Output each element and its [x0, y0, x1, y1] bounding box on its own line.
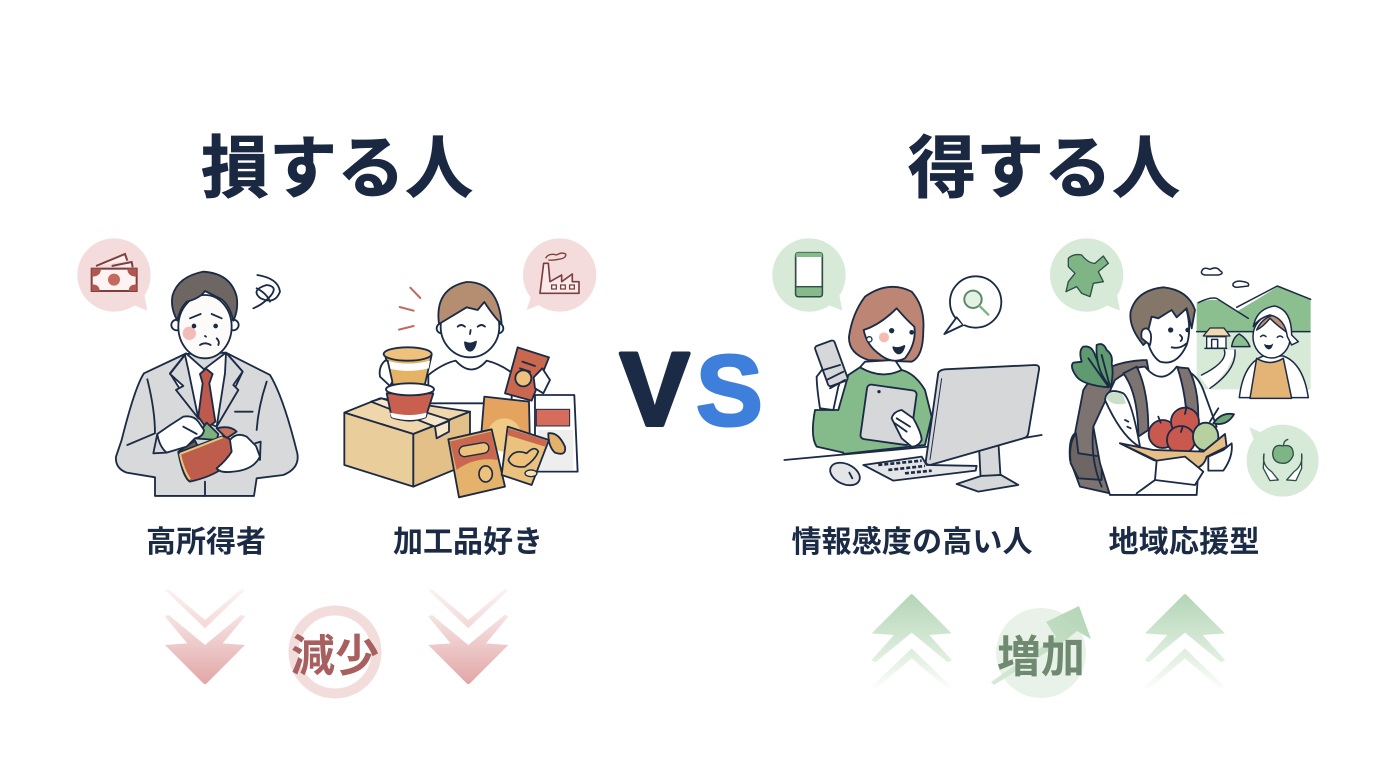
letter V: V — [620, 332, 689, 448]
cookie bag front — [502, 427, 549, 485]
heading: 得する人: 得する人 — [908, 131, 1180, 207]
badge: 増加 — [991, 606, 1091, 698]
suit jacket — [116, 353, 298, 496]
backpack straps — [1123, 367, 1198, 437]
tablet in hand — [860, 384, 922, 447]
keyboard — [863, 457, 977, 481]
up arrows: increase — [872, 594, 1225, 688]
label: 地域応援型: 地域応援型 — [1108, 526, 1260, 559]
computer mouse — [827, 458, 863, 490]
necktie — [198, 369, 215, 428]
sweater — [813, 367, 932, 454]
icon: worry swirl — [253, 275, 280, 308]
desk line — [784, 435, 1042, 460]
double chevron right — [428, 589, 508, 684]
icon: money speech bubble — [77, 238, 151, 312]
snack bag — [480, 397, 530, 452]
hands — [153, 416, 261, 472]
instant noodle cups — [380, 347, 434, 421]
snack pack held up — [505, 347, 550, 401]
double chevron left — [872, 594, 952, 688]
badge: 減少: 減少 — [291, 632, 379, 681]
hands holding basket — [1093, 427, 1232, 493]
head — [437, 282, 503, 357]
daikon radish — [1072, 344, 1140, 447]
shirt — [428, 361, 512, 403]
label: 加工品好き: 加工品好き — [393, 526, 543, 559]
face — [864, 308, 915, 361]
excitement lines — [399, 288, 420, 330]
shirt — [170, 353, 243, 427]
label: 高所得者: 高所得者 — [146, 526, 266, 559]
heading: 損する人: 損する人 — [201, 131, 473, 207]
down arrows: decrease — [165, 589, 508, 684]
letter S: S — [696, 335, 763, 447]
label: 情報感度の高い人: 情報感度の高い人 — [792, 526, 1032, 559]
smartphone in hand — [814, 340, 848, 410]
countryside scene — [1197, 268, 1311, 390]
cardboard box — [344, 398, 470, 487]
icon: smartphone speech bubble — [772, 238, 846, 312]
apples and pear — [1149, 407, 1234, 454]
head — [1130, 287, 1195, 363]
badge: 増加: 増加 — [997, 633, 1085, 682]
illustration: information-savvy woman — [772, 238, 1042, 492]
head — [171, 272, 239, 358]
wallet with banknotes — [178, 423, 237, 482]
VS mark — [620, 332, 763, 448]
hair back — [849, 287, 924, 362]
illustration: high income man with wallet — [77, 238, 298, 496]
icon: region map speech bubble — [1050, 238, 1123, 312]
farmer woman — [1239, 306, 1308, 398]
icon: apple in hands speech bubble — [1247, 425, 1319, 497]
icon: search speech bubble — [944, 276, 1001, 334]
badge: 減少 — [291, 610, 379, 694]
white food bag — [535, 395, 578, 472]
neck — [860, 360, 902, 374]
icon: factory speech bubble — [523, 238, 596, 312]
chip bag front — [448, 429, 505, 497]
double chevron left — [165, 589, 245, 684]
lapels — [170, 353, 243, 427]
illustration: local supporter with vegetables — [1050, 238, 1319, 497]
backpack — [1070, 360, 1153, 493]
man torso — [1093, 367, 1217, 495]
basket — [1120, 434, 1227, 469]
illustration: processed food lover — [344, 238, 596, 497]
computer monitor — [926, 365, 1039, 492]
double chevron right — [1145, 594, 1225, 688]
